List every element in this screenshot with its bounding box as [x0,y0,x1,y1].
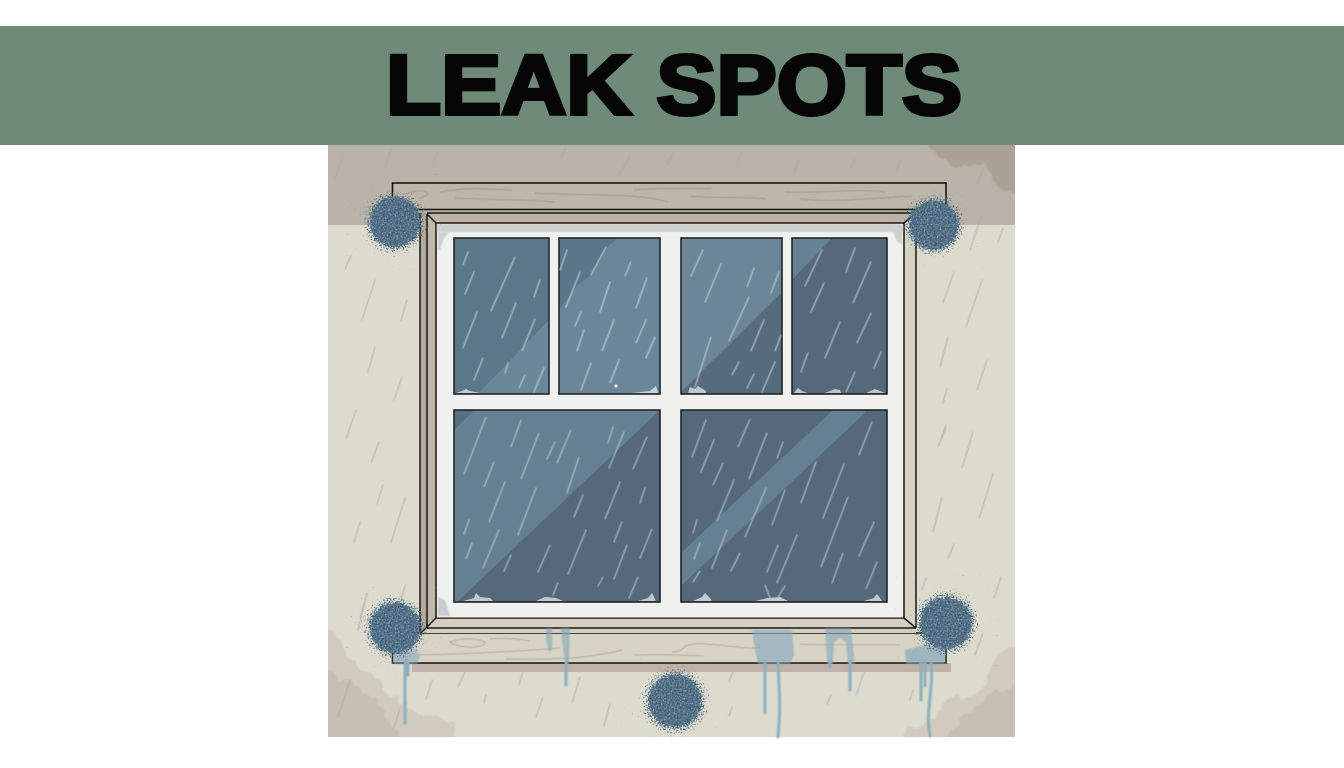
wall rain streaks [335,147,1003,728]
pane: top second [559,238,660,394]
rain on pane [801,248,881,392]
window frame [420,213,916,633]
pane: top fourth [792,238,887,394]
mold spot: bottom right [908,585,984,661]
sash corner shading [438,232,449,250]
frame top strip [427,213,916,223]
mold spot: top left [358,185,432,259]
frame left strip [420,213,427,633]
stain: sill centre right [825,628,855,664]
window sash [437,224,903,618]
damp stain: lower right [904,647,1015,737]
pane: top left [454,238,549,394]
rain on pane [463,252,544,392]
panel: wall [320,140,1025,745]
stain: sill centre left [546,628,570,664]
lintel wood grain [408,188,912,202]
damp stain: top right [928,145,1015,194]
title banner [0,26,1344,145]
title: LEAK SPOTS [386,38,962,132]
damp stain: lower left [328,630,455,737]
mold spot: bottom left [358,591,432,665]
mold spot: below sill [636,662,714,740]
water stains and drips [393,628,945,737]
rain on pane [692,419,877,598]
drips [405,662,932,737]
rain on pane [691,250,781,392]
stain: sill centre [752,630,794,664]
frame right strip [904,213,916,628]
mold spot: top right [898,189,970,261]
sash top grey band [437,224,903,232]
header lintel board [392,183,946,210]
pane: bottom left [454,410,660,602]
pane: top third [681,238,782,394]
sill board [392,633,951,672]
rain on pane [560,247,655,390]
rain on pane [464,417,652,598]
sill wood grain [420,638,900,659]
pane: bottom right [681,410,887,602]
frame outlines [420,213,916,633]
sill shadow [412,663,951,672]
stain: sill left [393,645,420,664]
frame bottom strip [427,618,916,628]
stain: sill right [905,645,945,664]
wall upper band [328,145,1015,225]
